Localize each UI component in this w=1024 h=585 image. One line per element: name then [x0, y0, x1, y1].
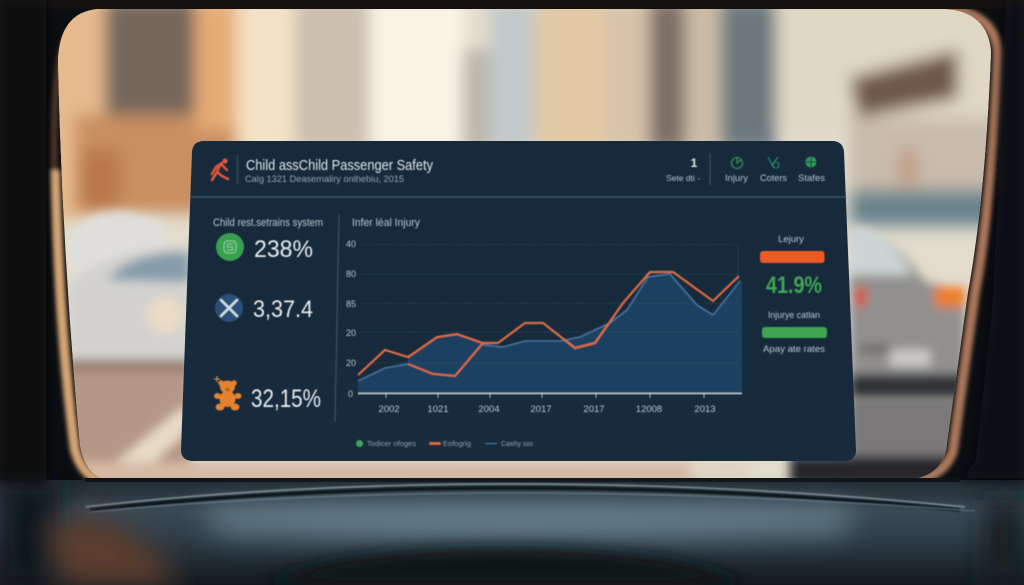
green bar: [762, 327, 827, 338]
dashboard: [0, 478, 1024, 585]
x axis labels: 2017: [583, 404, 605, 415]
stat: 238%: 238%: [254, 236, 313, 263]
y axis labels: 0: [348, 389, 353, 399]
icon: stafes: [806, 156, 816, 168]
window trim: [54, 10, 998, 482]
header divider: [191, 196, 846, 198]
subtitle: Calg 1321 Deasemaliry onlhebiu, 2015: [245, 174, 404, 185]
chart heading: Infer léal Injury: [352, 217, 420, 229]
y axis labels: 20: [346, 358, 356, 368]
right car: [850, 226, 965, 398]
dark recess at bottom: [265, 548, 745, 585]
dark corners: [0, 480, 60, 585]
orange lower series: [408, 343, 483, 376]
stat heading: Child rest.setrains system: [213, 217, 323, 229]
icon: crossed tools: [215, 294, 243, 322]
header vertical rule: [236, 155, 238, 184]
header counter: 1: [691, 156, 698, 170]
x axis labels: 2013: [694, 404, 716, 415]
chart grid: [362, 244, 740, 363]
seat shoulder in foreground: [45, 519, 180, 585]
dashboard panel: [181, 141, 856, 461]
y axis labels: 20: [346, 328, 356, 338]
chart legend: [356, 439, 533, 448]
line chart: [346, 239, 742, 415]
x axis labels: [378, 404, 716, 415]
header counter: Sete dti -: [666, 173, 700, 183]
y axis labels: [346, 239, 356, 399]
orange bar: [760, 251, 824, 263]
chart legend: Eofogrig: [443, 439, 471, 448]
label: injury: Injury: [725, 173, 749, 183]
blurred city street seen through the window: [40, 0, 1010, 490]
dashboard sheen: [200, 502, 860, 538]
x axis: [358, 393, 742, 398]
label: coters: Coters: [760, 173, 788, 183]
stat: 32,15%: 32,15%: [251, 385, 321, 413]
label: stafes: Stafes: [798, 173, 826, 183]
dashboard rib: [85, 484, 975, 512]
y axis labels: 40: [346, 239, 356, 249]
x axis labels: 2017: [530, 404, 552, 415]
road: [73, 365, 954, 478]
stat: 3,37.4: 3,37.4: [253, 296, 313, 323]
chart legend: Cawhy sos: [501, 439, 533, 448]
y axis labels: 80: [346, 269, 356, 279]
blue series: [358, 274, 740, 381]
side label: apay ate rates: Apay ate rates: [763, 344, 825, 355]
x axis labels: 1021: [427, 404, 449, 415]
x axis labels: 2002: [378, 404, 400, 415]
left car: [68, 212, 190, 370]
top dark edge: [0, 0, 1024, 9]
x axis labels: 2004: [478, 404, 500, 415]
orange upper series: [358, 272, 739, 375]
title: Child assChild Passenger Safety: [246, 158, 434, 174]
side label: injury: Lejury: [778, 234, 804, 245]
column divider: [335, 214, 339, 422]
chart area fill: [358, 274, 742, 393]
y axis labels: 85: [346, 299, 356, 309]
icon: teddy bear: [214, 376, 242, 410]
icon: running figure: [212, 158, 228, 180]
icon: green badge: [216, 233, 244, 261]
side label: injurye catlan: Injurye catlan: [768, 310, 820, 321]
header counter: [666, 156, 700, 183]
icon: coters: [768, 157, 779, 168]
icon: injury: [732, 157, 742, 168]
stat: 41.9%: 41.9%: [766, 272, 822, 299]
buildings: [40, 0, 1006, 226]
chart legend: Todicer ofoges: [367, 439, 416, 448]
x axis labels: 12008: [636, 404, 662, 415]
